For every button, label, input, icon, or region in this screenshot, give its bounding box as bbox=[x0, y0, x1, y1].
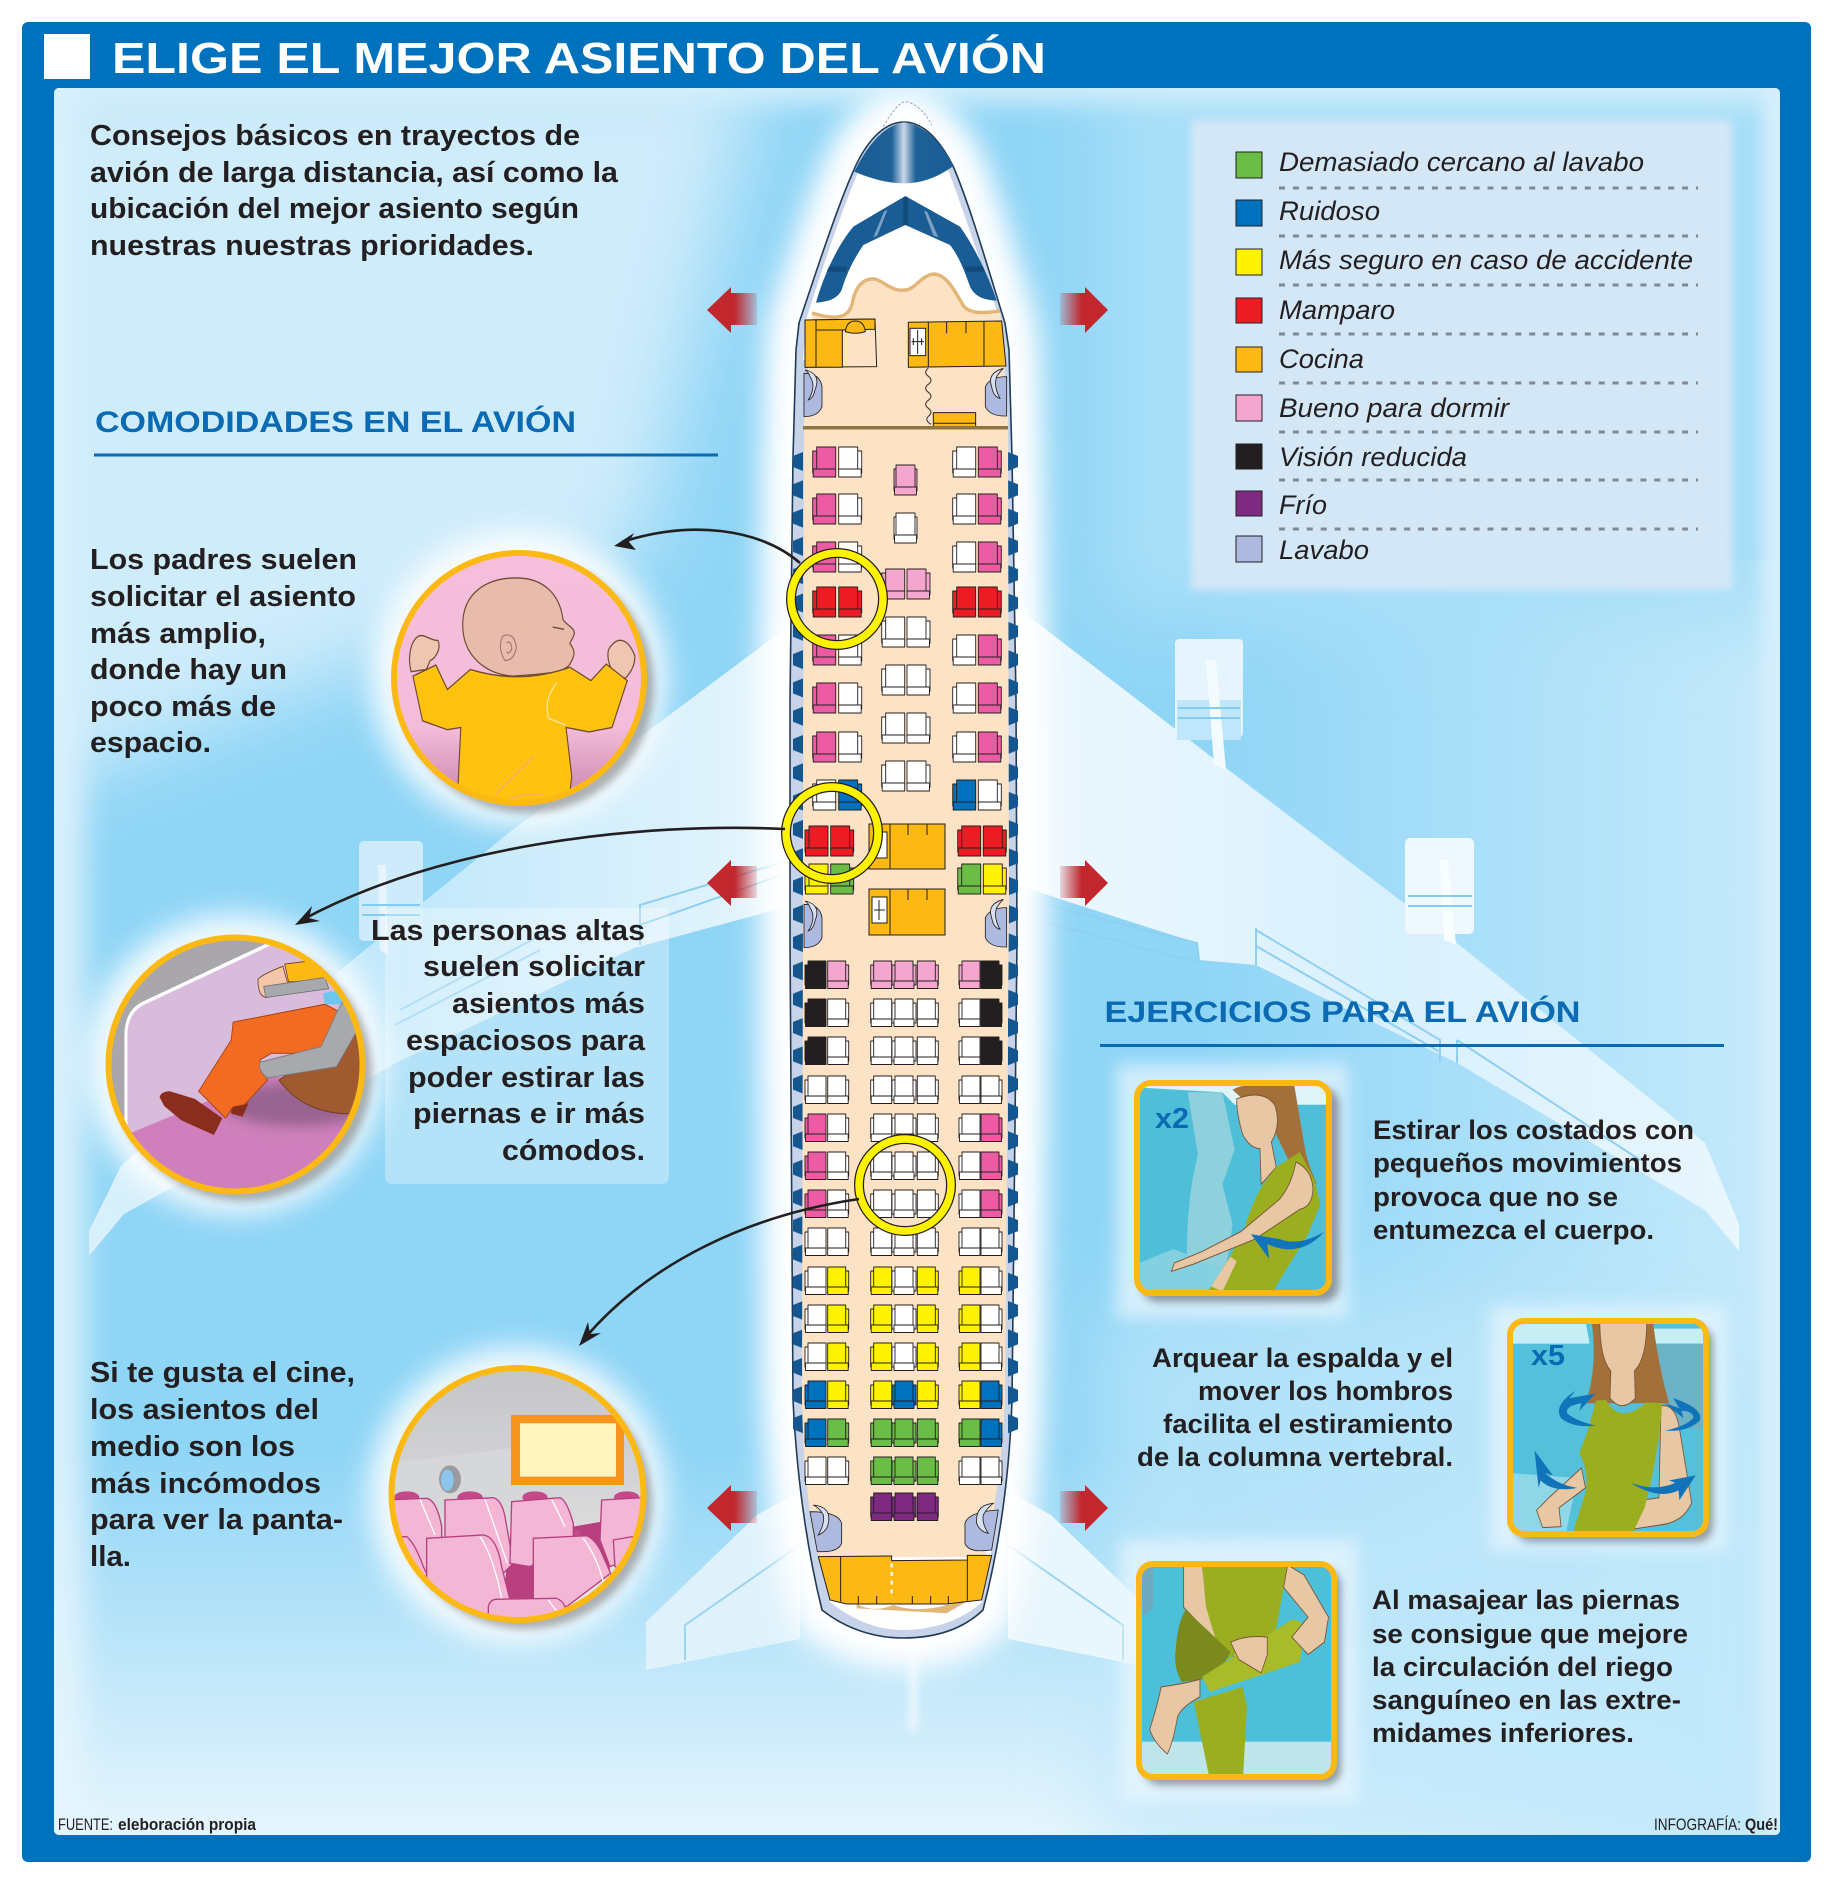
nose interior bbox=[803, 125, 1003, 360]
text: cine bbox=[90, 1357, 355, 1573]
legend labels: Frío bbox=[1279, 490, 1327, 520]
text: exercise 3: la circulación del riego bbox=[1372, 1652, 1673, 1682]
infographic credit: INFOGRAFÍA: bbox=[1654, 1815, 1741, 1834]
fuselage glow bbox=[790, 122, 1017, 1638]
highlight ring: emergency row bbox=[786, 787, 878, 879]
rear lavatories bbox=[810, 1503, 998, 1552]
intro text: nuestras nuestras prioridades. bbox=[90, 230, 534, 262]
fuselage shell bbox=[790, 122, 1017, 1638]
heading: ejercicios: EJERCICIOS PARA EL AVIÓN bbox=[1104, 995, 1580, 1029]
repetition label x5: x5 bbox=[1531, 1340, 1565, 1372]
text: exercise 1: Estirar los costados con bbox=[1373, 1115, 1694, 1145]
source credit: eleboración propia bbox=[118, 1815, 256, 1834]
engine: left bbox=[359, 841, 423, 955]
text box: personas altas bbox=[371, 908, 669, 1184]
intro text: Consejos básicos en trayectos de bbox=[90, 120, 580, 152]
glow: exercise panels bbox=[1116, 1064, 1726, 1802]
text: cine: medio son los bbox=[90, 1431, 295, 1463]
tail streak bbox=[909, 1630, 918, 1730]
legend labels: Ruidoso bbox=[1279, 196, 1380, 226]
legend labels: Cocina bbox=[1279, 344, 1364, 374]
text: cine: más incómodos bbox=[90, 1468, 321, 1500]
text: cine: los asientos del bbox=[90, 1394, 319, 1426]
text: exercise 1: entumezca el cuerpo. bbox=[1373, 1215, 1654, 1245]
illustration: sleeping baby bbox=[394, 553, 654, 813]
middle lavatories bbox=[804, 899, 1007, 948]
dashed nose outline bbox=[883, 102, 932, 127]
text box: personas altas: piernas e ir más bbox=[413, 1098, 645, 1130]
legend swatches bbox=[1236, 152, 1262, 562]
legend labels: Lavabo bbox=[1279, 535, 1369, 565]
legend labels: Demasiado cercano al lavabo bbox=[1279, 147, 1644, 177]
engine: right outer bbox=[1405, 838, 1474, 945]
title: ELIGE EL MEJOR ASIENTO DEL AVIÓN bbox=[112, 33, 1046, 83]
cabin floor bbox=[802, 274, 1009, 1557]
front storage box bbox=[933, 413, 976, 428]
tail interior bbox=[815, 1530, 995, 1630]
text: exercise 2 bbox=[1137, 1343, 1453, 1472]
text box: personas altas: suelen solicitar bbox=[423, 951, 645, 983]
exercise 3: leg massage bbox=[1137, 1564, 1341, 1785]
red arrows: right side bbox=[1060, 287, 1108, 1531]
text: exercise 3 bbox=[1372, 1585, 1688, 1748]
text: cine: lla. bbox=[90, 1541, 131, 1573]
legend labels: Visión reducida bbox=[1279, 442, 1467, 472]
cabin wave edge bbox=[812, 274, 1000, 317]
text: exercise 2: Arquear la espalda y el bbox=[1152, 1343, 1453, 1373]
highlight ring: bulkhead row bbox=[791, 553, 883, 645]
heading: comodidades bbox=[94, 405, 718, 456]
legend dotted rules bbox=[1279, 188, 1698, 529]
legend labels: Más seguro en caso de accidente bbox=[1279, 245, 1693, 275]
bulkhead divider bbox=[803, 426, 1008, 430]
text: cine: para ver la panta- bbox=[90, 1504, 343, 1536]
text: padres: solicitar el asiento bbox=[90, 581, 356, 613]
text: exercise 2: facilita el estiramiento bbox=[1163, 1409, 1453, 1439]
right stabilizer bbox=[1008, 1498, 1136, 1664]
intro text: ubicación del mejor asiento según bbox=[90, 193, 579, 225]
windows bbox=[793, 452, 1018, 1442]
highlight ring: middle seats bbox=[859, 1139, 951, 1231]
text: exercise 3: midames inferiores. bbox=[1372, 1718, 1634, 1748]
infographic credit: Qué! bbox=[1745, 1815, 1778, 1834]
middle galleys bbox=[869, 824, 945, 935]
text: exercise 3: se consigue que mejore bbox=[1372, 1619, 1688, 1649]
rear galley bbox=[818, 1555, 992, 1613]
nose windshield bbox=[854, 122, 953, 183]
illustration: cinema seats bbox=[383, 1368, 652, 1629]
text: padres: donde hay un bbox=[90, 654, 287, 686]
text: exercise 1 bbox=[1373, 1115, 1694, 1245]
engine: right inner bbox=[1175, 639, 1243, 770]
text box: personas altas: Las personas altas bbox=[371, 915, 645, 947]
left wing bbox=[89, 625, 790, 1256]
exercise 2: shoulder rolls bbox=[1508, 1321, 1713, 1542]
front curtain bbox=[926, 368, 931, 424]
left stabilizer bbox=[646, 1491, 800, 1670]
source credit: FUENTE: bbox=[58, 1815, 113, 1834]
title marker square bbox=[44, 34, 90, 79]
text: exercise 3: sanguíneo en las extre- bbox=[1372, 1685, 1681, 1715]
text box: personas altas: espaciosos para bbox=[406, 1025, 646, 1057]
legend labels: Mamparo bbox=[1279, 295, 1395, 325]
intro text bbox=[90, 120, 619, 262]
text box: personas altas: asientos más bbox=[452, 988, 645, 1020]
seats: rear cabin bbox=[805, 961, 1002, 1520]
panel: legend bbox=[1191, 120, 1732, 590]
seats: forward cabin bbox=[805, 447, 1006, 894]
red arrows: left side bbox=[707, 287, 757, 1531]
heading: comodidades: COMODIDADES EN EL AVIÓN bbox=[95, 405, 576, 439]
source credit bbox=[58, 1815, 256, 1834]
text: exercise 3: Al masajear las piernas bbox=[1372, 1585, 1680, 1615]
repetition label x2: x2 bbox=[1155, 1103, 1189, 1135]
text box: personas altas: cómodos. bbox=[502, 1135, 645, 1167]
curved arrow to cinema bbox=[579, 1199, 859, 1346]
text: exercise 2: mover los hombros bbox=[1198, 1376, 1453, 1406]
heading: ejercicios bbox=[1100, 995, 1724, 1047]
text: padres: más amplio, bbox=[90, 618, 266, 650]
text: cine: Si te gusta el cine, bbox=[90, 1357, 355, 1389]
front galleys bbox=[805, 319, 1006, 367]
flap lines bbox=[395, 860, 1640, 1160]
text: exercise 2: de la columna vertebral. bbox=[1137, 1442, 1453, 1472]
intro text: avión de larga distancia, así como la bbox=[90, 157, 619, 189]
right wing bbox=[1018, 608, 1739, 1251]
curved arrow to baby bbox=[614, 530, 800, 563]
legend labels bbox=[1279, 147, 1693, 565]
text: exercise 1: pequeños movimientos bbox=[1373, 1148, 1682, 1178]
curved arrow to tall passenger bbox=[295, 828, 785, 925]
text: padres bbox=[90, 544, 357, 759]
text: exercise 1: provoca que no se bbox=[1373, 1182, 1618, 1212]
text: padres: poco más de bbox=[90, 691, 276, 723]
glow: circle backgrounds bbox=[85, 530, 667, 1643]
aeroplane cabin plan bbox=[790, 102, 1018, 1638]
exercise 1: side stretch bbox=[1137, 1080, 1339, 1302]
illustration: tall passenger legs bbox=[108, 938, 386, 1210]
legend labels: Bueno para dormir bbox=[1279, 393, 1510, 423]
text box: personas altas: poder estirar las bbox=[408, 1062, 645, 1094]
text: padres: espacio. bbox=[90, 727, 211, 759]
text: padres: Los padres suelen bbox=[90, 544, 357, 576]
cockpit window arch bbox=[816, 196, 997, 303]
front lavatories bbox=[804, 368, 1007, 417]
